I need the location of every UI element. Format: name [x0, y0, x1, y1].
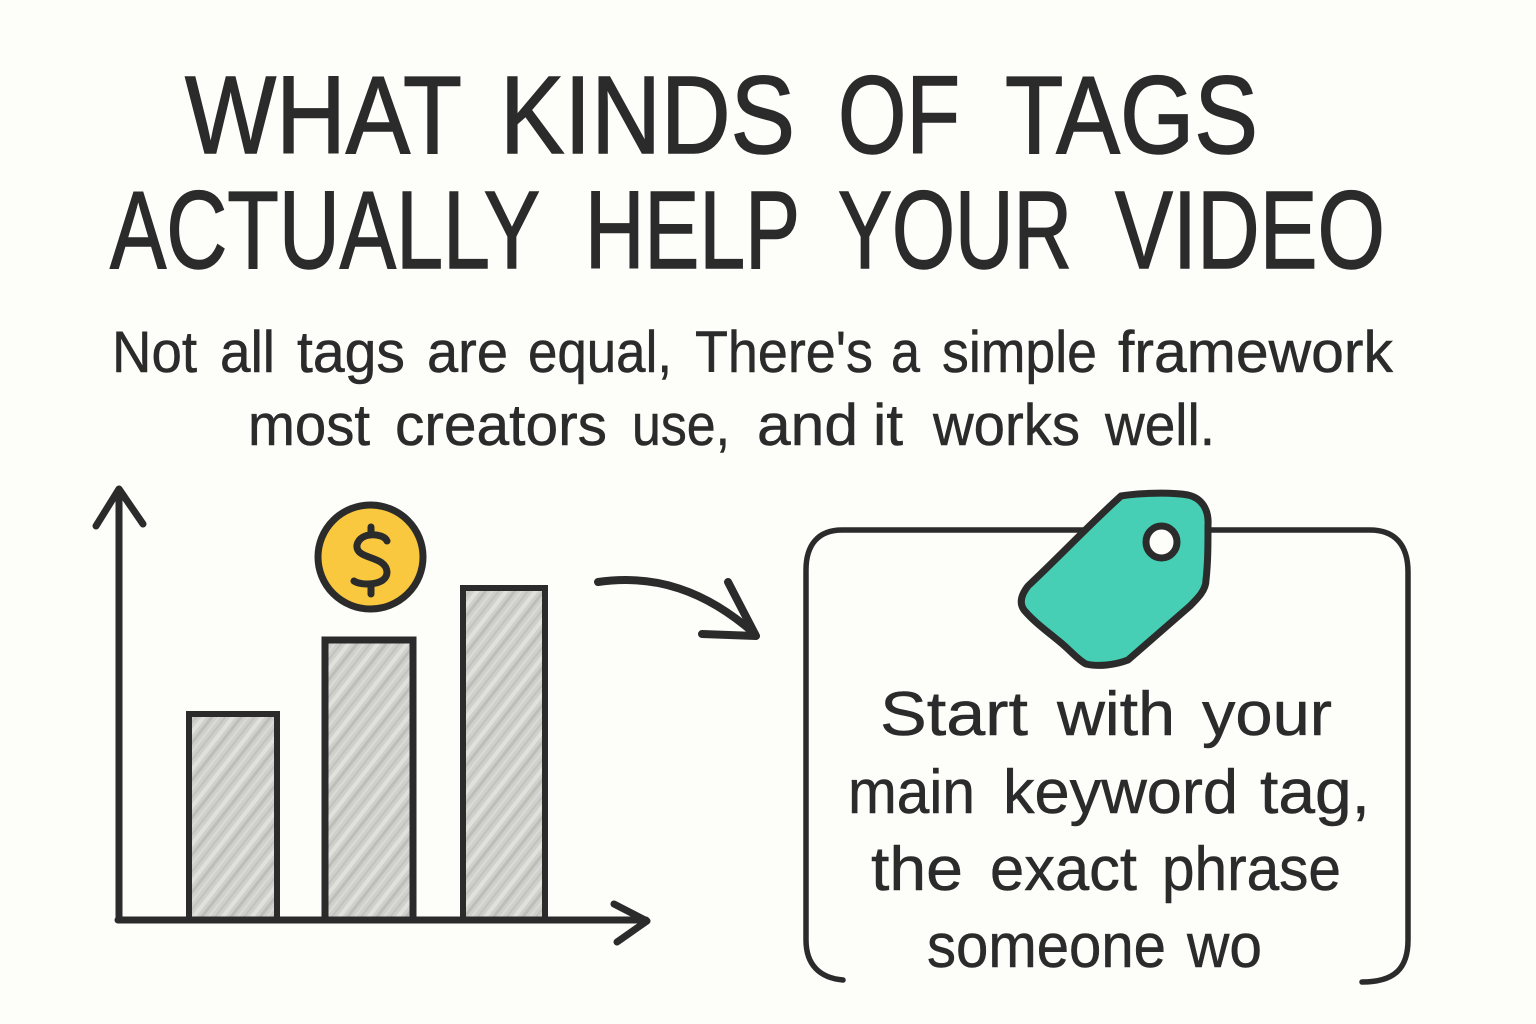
subtitle: and: [757, 393, 858, 458]
subtitle: simple: [942, 320, 1097, 385]
callout text: Start: [880, 680, 1028, 749]
callout text: wo: [1186, 912, 1262, 981]
callout box: [806, 493, 1408, 982]
callout text: phrase: [1162, 835, 1341, 904]
callout text: with: [1056, 680, 1175, 749]
callout text: your: [1202, 680, 1332, 749]
title: HELP: [585, 169, 800, 292]
subtitle: well.: [1104, 393, 1215, 458]
chart axes: [96, 489, 647, 942]
title: ACTUALLY: [110, 169, 540, 292]
bar: medium: [325, 640, 413, 920]
title: OF: [838, 54, 960, 177]
subtitle: creators: [395, 393, 607, 458]
subtitle: [112, 320, 1394, 458]
subtitle: are: [427, 320, 508, 385]
subtitle: equal,: [528, 320, 672, 385]
title: KINDS: [500, 54, 795, 177]
bar: short: [189, 714, 277, 920]
callout text: someone: [927, 912, 1166, 981]
subtitle: works: [932, 393, 1080, 458]
subtitle: all: [220, 320, 275, 385]
title: TAGS: [1005, 54, 1258, 177]
title: WHAT: [185, 54, 462, 177]
icon: price tag: [1021, 493, 1208, 665]
subtitle: There's: [695, 320, 873, 385]
subtitle: use,: [632, 393, 730, 458]
arrow: [598, 580, 756, 636]
bar: tall: [463, 588, 545, 920]
callout text: [848, 680, 1370, 981]
subtitle: most: [248, 393, 370, 458]
subtitle: it: [873, 393, 903, 458]
title: VIDEO: [1115, 169, 1385, 292]
bar chart: [96, 489, 647, 942]
subtitle: a: [891, 320, 921, 385]
callout text: the: [871, 835, 963, 904]
callout text: keyword: [1003, 758, 1238, 827]
subtitle: framework: [1118, 320, 1394, 385]
subtitle: Not: [112, 320, 197, 385]
icon: dollar coin: [318, 505, 423, 609]
title: [110, 54, 1385, 292]
callout text: tag,: [1260, 758, 1370, 827]
title: YOUR: [838, 169, 1072, 292]
callout text: main: [848, 758, 975, 827]
subtitle: tags: [297, 320, 405, 385]
callout text: exact: [990, 835, 1137, 904]
